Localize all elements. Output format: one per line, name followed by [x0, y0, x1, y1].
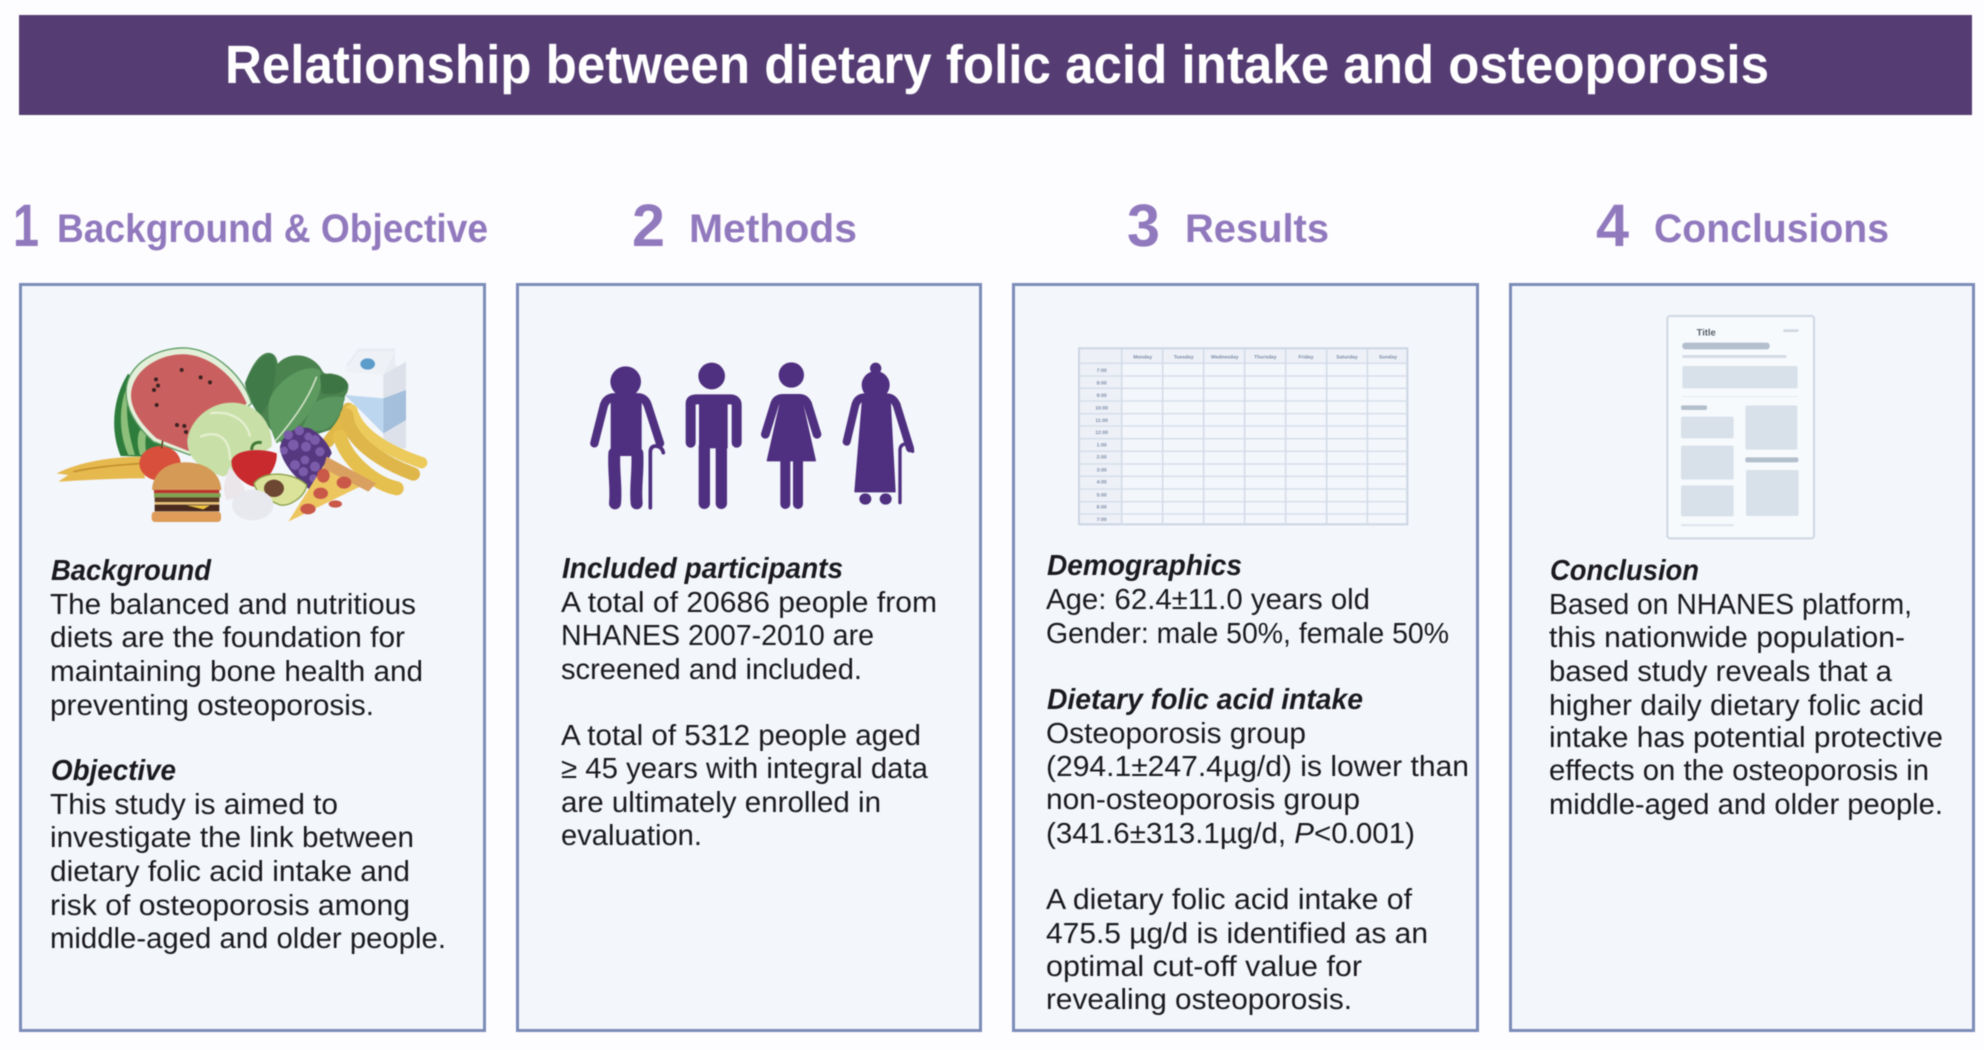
text: demographics: Demographics: [1047, 550, 1242, 582]
text: optimal cut-off: [1046, 884, 1428, 1016]
text: dietary folic acid intake: (341.6±313.1µg/d, P<0.001): [1046, 818, 1415, 850]
time labels: 12:00: [1095, 430, 1108, 435]
pizza slice: [288, 457, 376, 522]
heading: 4 Conclusions: [1596, 192, 1889, 259]
watermelon: [114, 348, 252, 457]
icon: assorted healthy foods: [57, 348, 422, 522]
day labels: [1133, 354, 1397, 360]
text: conclusion: intake has potential protective: [1549, 722, 1943, 754]
text: optimal cut-off: optimal cut-off value for: [1046, 951, 1362, 983]
leafy greens: [245, 353, 348, 445]
text: conclusion: Conclusion: [1550, 555, 1699, 587]
text: objective: Objective: [51, 755, 176, 787]
text: conclusion: [1549, 555, 1943, 821]
day labels: Thursday: [1254, 354, 1277, 360]
text: included participants: NHANES 2007-2010 are: [561, 620, 874, 652]
title banner: Relationship between dietary folic acid intake and osteoporosis: [225, 35, 1769, 95]
icon: document thumbnail: Title: [1697, 327, 1716, 338]
text: dietary folic acid intake: [1046, 684, 1469, 850]
day labels: Monday: [1133, 354, 1152, 360]
time labels: 6:00: [1097, 504, 1107, 510]
text: enrolled participants: ≥ 45 years with integral data: [561, 753, 929, 785]
text: dietary folic acid intake: Dietary folic acid intake: [1047, 684, 1363, 716]
text: objective: middle-aged and older people.: [50, 923, 446, 955]
text: included participants: screened and included.: [561, 654, 862, 686]
older woman with cane: [847, 363, 913, 505]
panel: methods: [518, 284, 980, 1030]
heading: 4 Conclusions: 4: [1596, 192, 1630, 259]
time labels: [1095, 368, 1108, 522]
heading: 3 Results: [1127, 192, 1329, 259]
text: conclusion: based study reveals that a: [1549, 656, 1893, 688]
text: enrolled participants: [561, 720, 929, 852]
text: conclusion: middle-aged and older people.: [1549, 789, 1943, 821]
burger: [152, 462, 221, 522]
text: enrolled participants: are ultimately enrolled in: [561, 787, 881, 819]
panel: results: [1014, 284, 1478, 1030]
grapes: [280, 426, 332, 490]
text: background: diets are the foundation for: [50, 622, 405, 654]
time labels: 2:00: [1097, 454, 1107, 460]
heading: 2 Methods: [632, 192, 857, 259]
text: dietary folic acid intake: (294.1±247.4µg/d) is lower than: [1046, 751, 1469, 783]
day labels: Wednesday: [1211, 354, 1239, 360]
text: background: preventing osteoporosis.: [50, 690, 374, 722]
text: demographics: [1046, 550, 1449, 650]
time labels: 1:00: [1097, 442, 1107, 448]
text: objective: risk of osteoporosis among: [50, 890, 410, 922]
text: dietary folic acid intake: Osteoporosis group: [1046, 718, 1306, 750]
text: background: maintaining bone health and: [50, 656, 423, 688]
text: objective: dietary folic acid intake and: [50, 856, 410, 888]
heading: 3 Results: 3: [1127, 192, 1160, 259]
apple: [139, 441, 181, 481]
heading: 4 Conclusions: Conclusions: [1654, 207, 1889, 251]
time labels: 8:00: [1097, 380, 1107, 386]
text: conclusion: this nationwide population-: [1549, 622, 1905, 654]
text: demographics: Age: 62.4±11.0 years old: [1046, 584, 1370, 616]
title banner: [19, 15, 1972, 115]
panel: background and objective: [20, 284, 484, 1030]
heading: 1 Background & Objective: 1: [13, 192, 39, 259]
text: optimal cut-off: 475.5 µg/d is identified as an: [1046, 918, 1428, 950]
cabbage: [187, 403, 272, 477]
time labels: 3:00: [1097, 467, 1107, 473]
text: background: [50, 555, 423, 722]
text: included participants: A total of 20686 people from: [561, 587, 937, 619]
time labels: 7:00: [1097, 368, 1107, 373]
day labels: Tuesday: [1174, 354, 1194, 360]
day labels: Friday: [1298, 354, 1314, 360]
text: background: Background: [51, 555, 212, 587]
time labels: 5:00: [1097, 492, 1107, 498]
heading: 2 Methods: 2: [632, 192, 665, 259]
heading: 2 Methods: Methods: [689, 207, 857, 251]
time labels: 4:00: [1097, 479, 1107, 485]
time labels: 9:00: [1097, 393, 1107, 398]
avocado: [254, 474, 307, 505]
text: demographics: Gender: male 50%, female 50%: [1046, 618, 1449, 650]
icon: document thumbnail: [1667, 316, 1814, 538]
text: enrolled participants: A total of 5312 people aged: [561, 720, 921, 752]
icon: weekly schedule table: [1079, 348, 1407, 524]
text: conclusion: effects on the osteoporosis in: [1549, 755, 1929, 787]
text: objective: This study is aimed to: [50, 789, 338, 821]
bell pepper: [232, 442, 277, 487]
time labels: 10:00: [1095, 405, 1108, 411]
text: optimal cut-off: revealing osteoporosis.: [1046, 984, 1352, 1016]
heading: 3 Results: Results: [1185, 207, 1329, 251]
garlic: [224, 467, 245, 500]
heading: 1 Background & Objective: Background & Objective: [57, 207, 488, 251]
text: included participants: Included participants: [562, 553, 843, 585]
time labels: 11:00: [1095, 418, 1108, 423]
man: [691, 363, 737, 503]
woman: [765, 362, 817, 504]
day labels: Sunday: [1379, 354, 1397, 360]
text: objective: [50, 755, 446, 955]
heading: 1 Background & Objective: [13, 192, 488, 259]
text: dietary folic acid intake: non-osteoporosis group: [1046, 784, 1360, 816]
icon: four people silhouettes: [594, 362, 913, 508]
panel: conclusions: [1510, 284, 1974, 1030]
milk carton: [345, 348, 406, 448]
older man with cane: [594, 366, 663, 508]
text: objective: investigate the link between: [50, 822, 414, 854]
text: enrolled participants: evaluation.: [561, 820, 702, 852]
egg: [232, 490, 273, 520]
text: conclusion: higher daily dietary folic acid: [1549, 690, 1924, 722]
corn: [57, 457, 145, 482]
bananas: [328, 408, 422, 488]
day labels: Saturday: [1336, 354, 1358, 360]
time labels: 7:00: [1097, 517, 1107, 522]
text: included participants: [561, 553, 937, 686]
text: optimal cut-off: A dietary folic acid intake of: [1046, 884, 1413, 916]
text: background: The balanced and nutritious: [50, 589, 416, 621]
text: conclusion: Based on NHANES platform,: [1549, 589, 1912, 621]
